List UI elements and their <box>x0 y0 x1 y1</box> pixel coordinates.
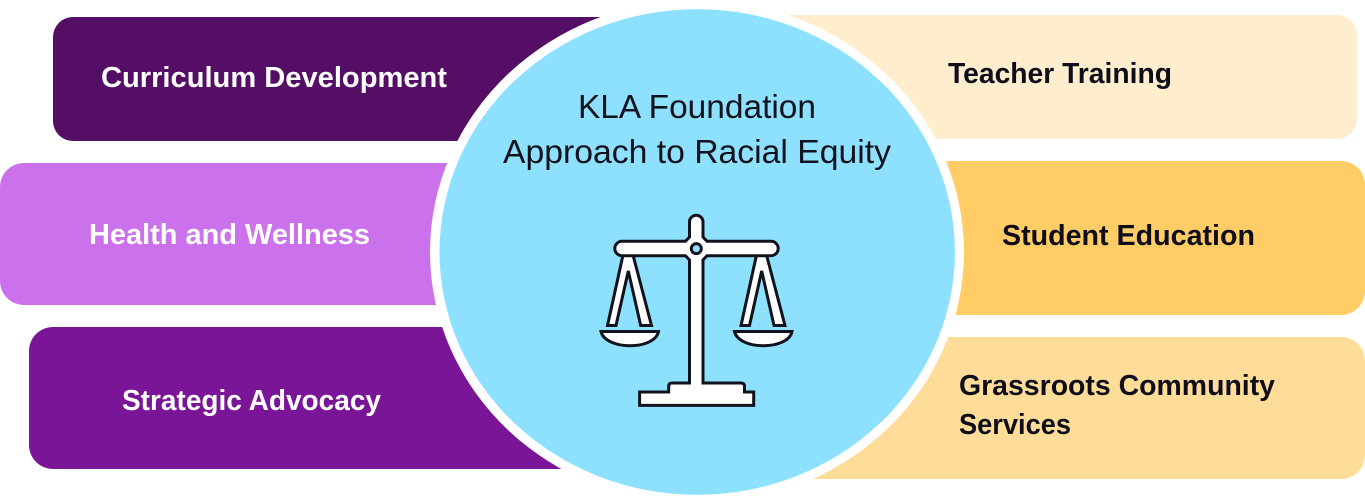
panel: Grassroots Community Services <box>740 337 1365 479</box>
label: Student Education: Student Education <box>1002 220 1255 252</box>
label: Health and Wellness: Health and Wellness <box>89 219 370 251</box>
title: KLA Foundation <box>578 88 816 125</box>
label: Strategic Advocacy: Strategic Advocacy <box>122 385 381 417</box>
title <box>503 88 892 170</box>
panel: Curriculum Development <box>53 17 673 141</box>
panel: Student Education <box>760 161 1365 315</box>
central circle <box>430 0 964 504</box>
label: Curriculum Development: Curriculum Development <box>101 62 448 94</box>
panel: Health and Wellness <box>0 163 620 305</box>
panel: Strategic Advocacy <box>29 327 649 469</box>
label: Teacher Training: Teacher Training <box>948 58 1172 90</box>
title: Approach to Racial Equity <box>503 133 892 170</box>
panel: Teacher Training <box>745 15 1357 139</box>
panel: Grassroots Community Services: Services <box>959 409 1071 441</box>
label: Grassroots Community Services: Grassroots Community <box>959 370 1275 402</box>
icon: balance scale <box>601 215 792 405</box>
